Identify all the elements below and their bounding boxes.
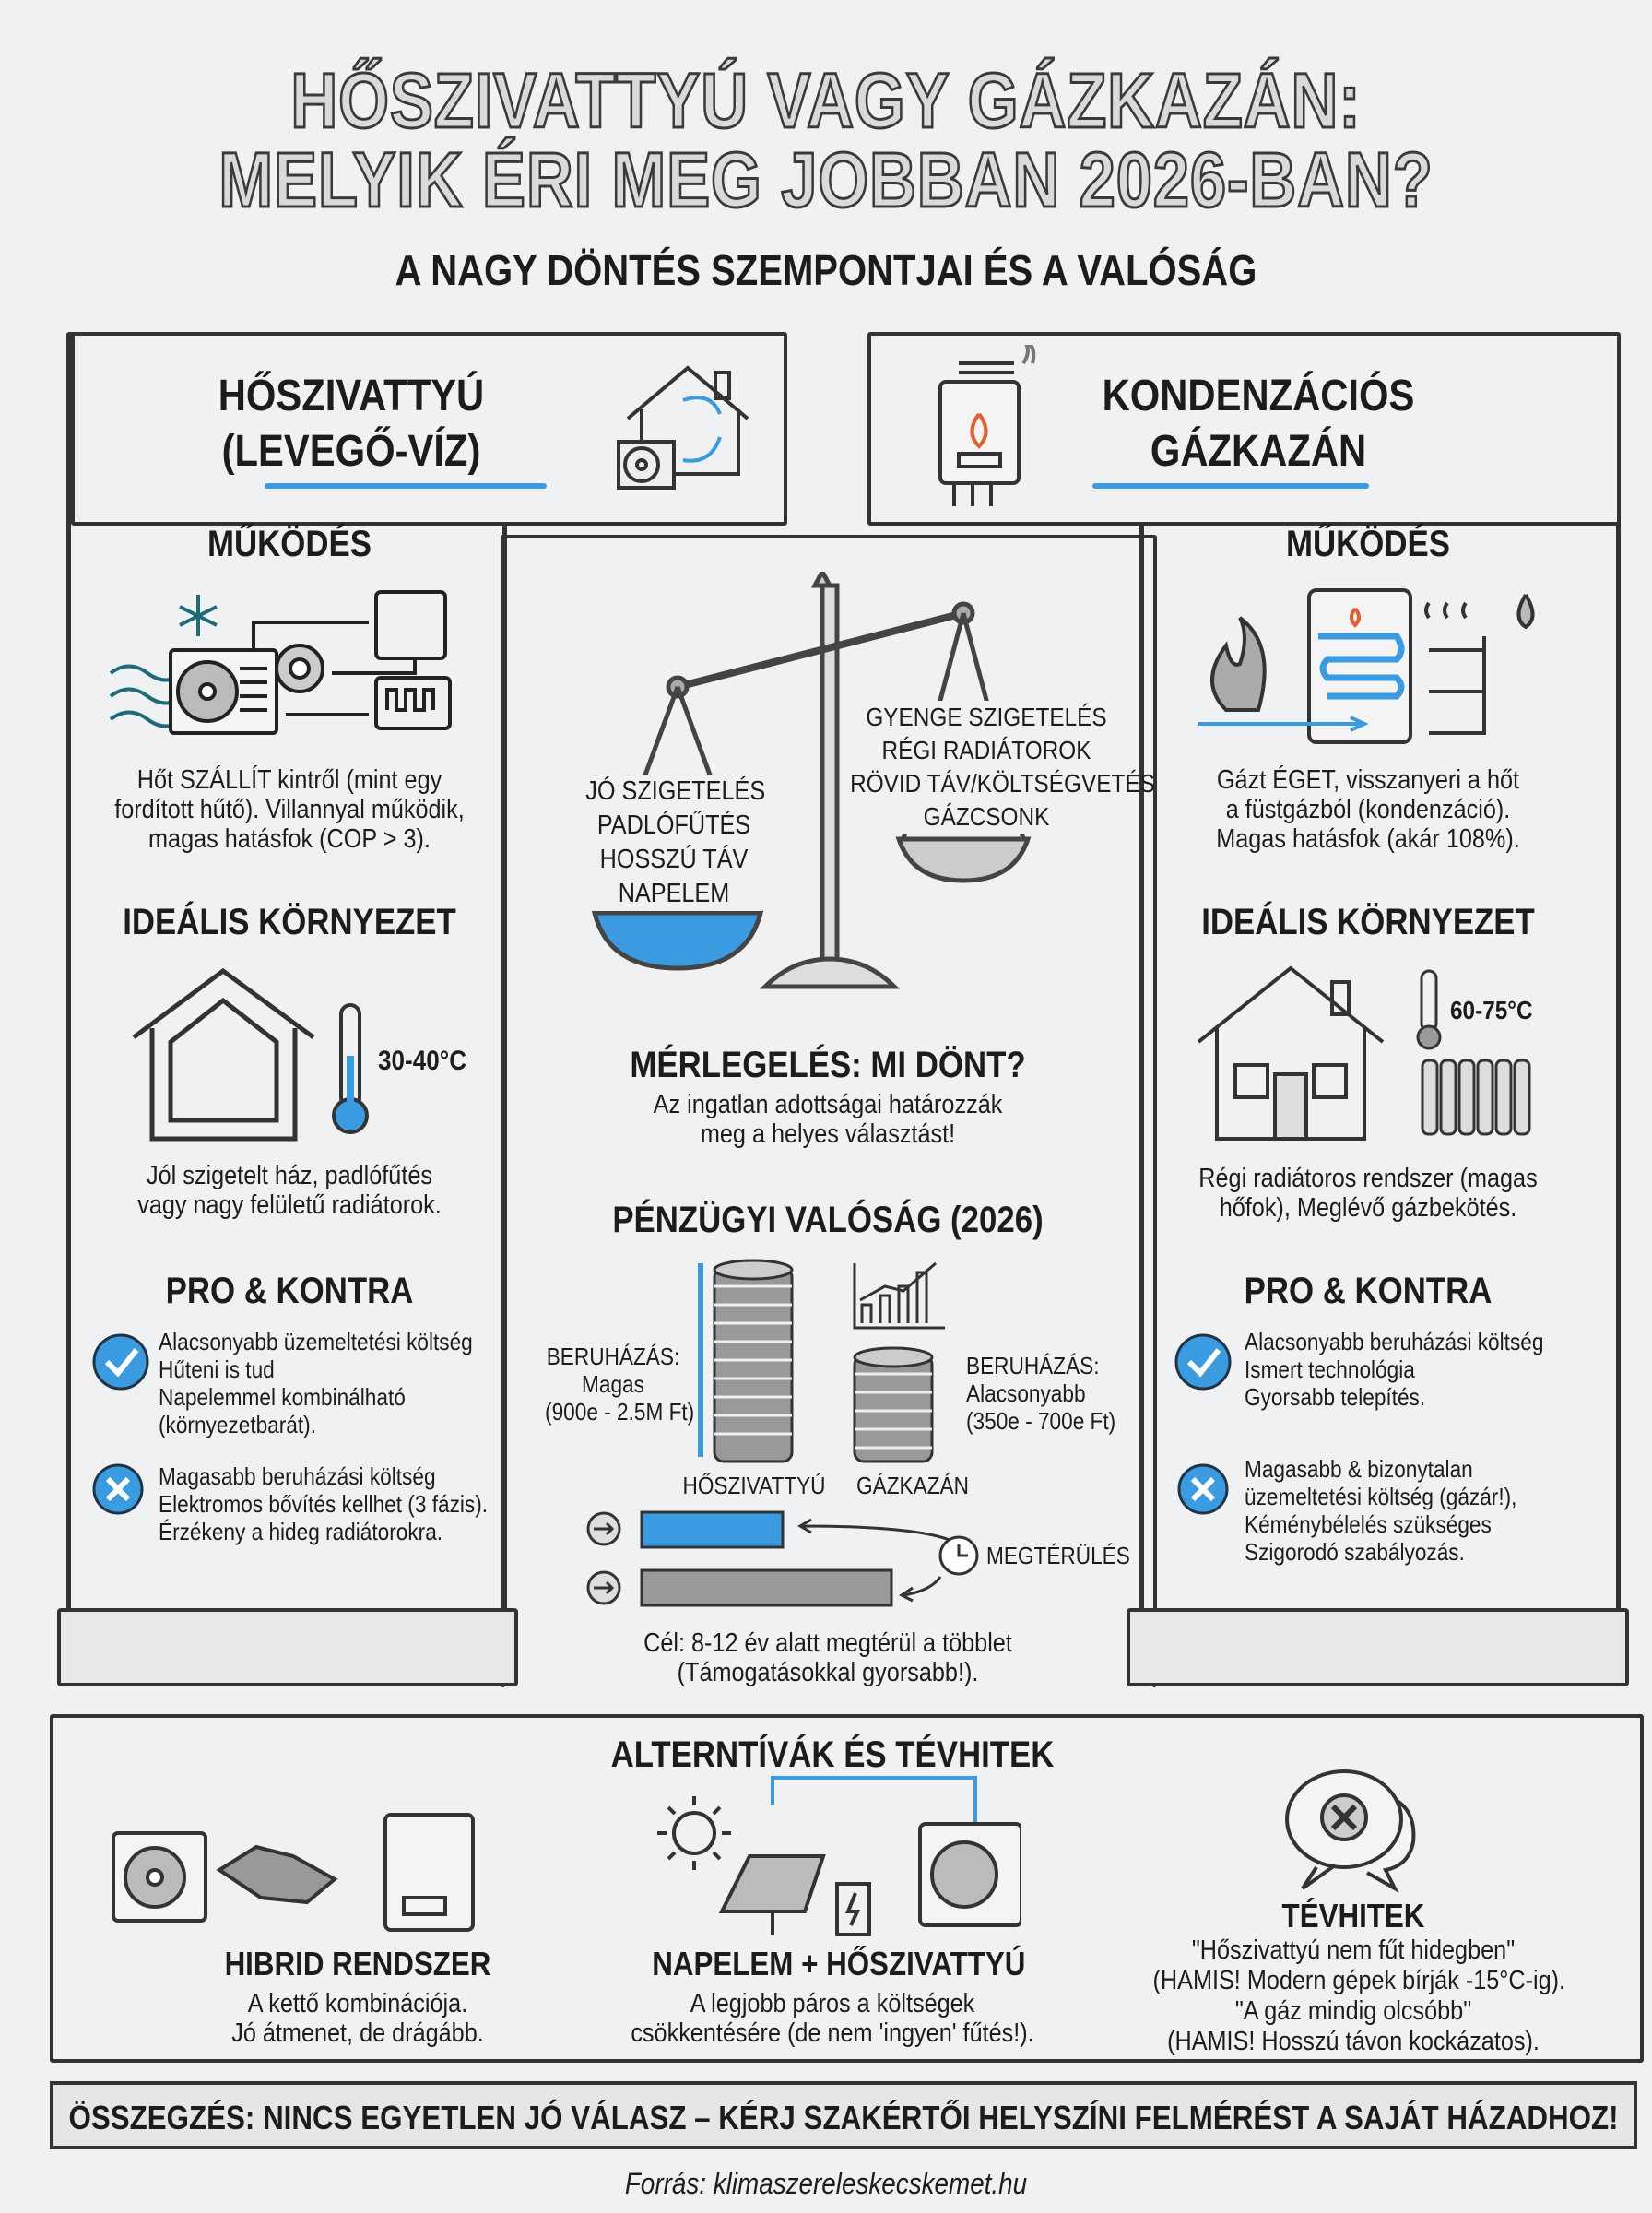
list: cons left [159, 1462, 488, 1545]
list: cons right: Magasabb & bizonytalan [1245, 1455, 1473, 1483]
panel: right header [867, 332, 1621, 526]
text: tévhitek: "Hőszivattyú nem fűt hidegben" [1192, 1935, 1515, 1965]
heading: mérlegelés: MÉRLEGELÉS: MI DÖNT? [630, 1045, 1026, 1085]
text: hibrid [231, 1989, 484, 2048]
list: pros right: Alacsonyabb beruházási költség [1245, 1328, 1543, 1355]
icon: thermometer 30-40 [332, 1003, 369, 1134]
label: gas investment: (350e - 700e Ft) [966, 1407, 1115, 1435]
list: pros left [159, 1328, 473, 1438]
heading: tévhitek: TÉVHITEK [1282, 1897, 1424, 1935]
text: mérlegelés [653, 1090, 1003, 1149]
text: tévhitek: "A gáz mindig olcsóbb" [1235, 1996, 1471, 2026]
text: boiler operation [1216, 765, 1520, 854]
text: napelem: csökkentésére (de nem 'ingyen' fűtés!). [631, 2018, 1034, 2048]
heading: condensing boiler: GÁZKAZÁN [1150, 427, 1366, 476]
list: cons right: Kéménybélelés szükséges [1245, 1510, 1492, 1538]
label: heat pump investment: BERUHÁZÁS: [547, 1343, 679, 1370]
list: cons left: Magasabb beruházási költség [159, 1462, 436, 1490]
heading: működés right: MŰKÖDÉS [1286, 524, 1450, 564]
list: cons right: Szigorodó szabályozás. [1245, 1538, 1465, 1566]
heading: pro & kontra right: PRO & KONTRA [1245, 1271, 1492, 1311]
text: boiler operation: Gázt ÉGET, visszanyeri a hőt [1217, 765, 1519, 795]
heading: condensing boiler: KONDENZÁCIÓS [1103, 372, 1414, 420]
label: 30-40°C: 30-40°C [378, 1046, 466, 1076]
label: heat pump investment: (900e - 2.5M Ft) [545, 1398, 694, 1426]
icon: check left [92, 1333, 149, 1391]
title [218, 57, 1434, 223]
text: ideal environment left: vagy nagy felületű radiátorok. [137, 1190, 442, 1220]
heading: pro & kontra left: PRO & KONTRA [166, 1271, 413, 1311]
text: ideal environment right: hőfok), Meglévő gázbekötés. [1220, 1193, 1516, 1223]
icon: old house [1197, 966, 1385, 1141]
list: pros left: (környezetbarát). [159, 1411, 316, 1438]
heading: heat pump: (LEVEGŐ-VÍZ) [222, 427, 480, 476]
label: heat pump investment: Magas [582, 1370, 644, 1398]
text: right pan: GÁZCSONK [924, 802, 1049, 831]
label: HŐSZIVATTYÚ: HŐSZIVATTYÚ [683, 1472, 825, 1499]
text: right pan [850, 701, 1123, 834]
panel: center [501, 535, 1157, 1687]
text: ideal environment left: Jól szigetelt ház, padlófűtés [147, 1161, 432, 1190]
panel: alternatives [50, 1714, 1644, 2063]
heading: ideális környezet left: IDEÁLIS KÖRNYEZET [123, 902, 456, 942]
list: pros left: Hűteni is tud [159, 1355, 275, 1383]
summary bar: ÖSSZEGZÉS: NINCS EGYETLEN JÓ VÁLASZ – KÉRJ SZAKÉRTŐI HELYSZÍNI FELMÉRÉST A SAJÁT HÁZADHOZ! [68, 2099, 1619, 2136]
icon: boiler heat exchanger [1198, 588, 1535, 744]
subtitle: A NAGY DÖNTÉS SZEMPONTJAI ÉS A VALÓSÁG [395, 246, 1257, 294]
text: heat pump operation: fordított hűtő). Villannyal működik, [114, 795, 465, 824]
icon: x left [92, 1464, 144, 1514]
text: tévhitek: (HAMIS! Modern gépek bírják -15°C-ig). [1152, 1966, 1565, 1995]
text: left pan: PADLÓFŰTÉS [597, 811, 750, 840]
title: MELYIK ÉRI MEG JOBBAN 2026-BAN? [218, 136, 1434, 223]
label: megtérülés: MEGTÉRÜLÉS [986, 1542, 1130, 1569]
icon: radiator [1422, 1059, 1530, 1136]
label: gas investment [966, 1352, 1115, 1435]
text: boiler operation: Magas hatásfok (akár 108%). [1216, 824, 1520, 854]
list: cons left: Elektromos bővítés kellhet (3 fázis). [159, 1490, 488, 1518]
label: GÁZKAZÁN: GÁZKAZÁN [856, 1472, 969, 1499]
text: right pan: RÖVID TÁV/KÖLTSÉGVETÉS [850, 769, 1155, 798]
text: goal: Cél: 8-12 év alatt megtérül a többlet [643, 1628, 1012, 1658]
text: ideal environment right [1198, 1164, 1538, 1223]
source: Forrás: klimaszereleskecskemet.hu [625, 2167, 1027, 2200]
heading: működés left: MŰKÖDÉS [207, 524, 372, 564]
heading: hibrid: HIBRID RENDSZER [225, 1945, 490, 1982]
panel: right column [1139, 516, 1621, 1614]
panel: left column [66, 332, 507, 1614]
text: right pan: RÉGI RADIÁTOROK [882, 736, 1091, 764]
text: left pan: JÓ SZIGETELÉS [585, 776, 765, 806]
icon: balance scale [592, 572, 1031, 988]
text: goal [643, 1628, 1012, 1687]
text: mérlegelés: Az ingatlan adottságai határozzák [654, 1090, 1002, 1119]
list: pros left: Napelemmel kombinálható [159, 1383, 406, 1411]
label: gas investment: BERUHÁZÁS: [966, 1352, 1100, 1379]
list: pros right: Ismert technológia [1245, 1355, 1415, 1383]
panel: left header [71, 332, 787, 526]
text: hibrid: A kettő kombinációja. [248, 1989, 467, 2018]
icon: insulated house [133, 968, 315, 1142]
pillar base left [57, 1608, 518, 1686]
underline [265, 483, 547, 489]
heading: condensing boiler [1103, 371, 1414, 476]
text: napelem: A legjobb páros a költségek [690, 1989, 974, 2018]
heading: heat pump: HŐSZIVATTYÚ [218, 372, 484, 420]
list: cons right [1245, 1455, 1516, 1566]
text: right pan: GYENGE SZIGETELÉS [866, 703, 1107, 731]
label: heat pump investment [545, 1343, 694, 1426]
label: gas investment: Alacsonyabb [966, 1379, 1086, 1407]
list: pros right [1245, 1328, 1543, 1411]
text: left pan: NAPELEM [619, 879, 729, 908]
text: mérlegelés: meg a helyes választást! [701, 1119, 955, 1149]
icon: x right [1178, 1464, 1228, 1514]
text: hibrid: Jó átmenet, de drágább. [231, 2018, 484, 2048]
chart: payback bars [586, 1510, 979, 1606]
text: goal: (Támogatásokkal gyorsabb!). [678, 1658, 978, 1687]
text: left pan [585, 775, 762, 911]
heading: ideális környezet right: IDEÁLIS KÖRNYEZET [1201, 902, 1535, 942]
icon: hybrid [112, 1813, 475, 1932]
chart: coin stacks [698, 1260, 945, 1462]
heading: alternatives: ALTERNTÍVÁK ÉS TÉVHITEK [611, 1734, 1054, 1775]
text: heat pump operation: Hőt SZÁLLÍT kintről (mint egy [137, 765, 442, 795]
text: boiler operation: a füstgázból (kondenzáció). [1226, 795, 1510, 824]
icon: heat pump diagram [109, 590, 452, 735]
list: pros left: Alacsonyabb üzemeltetési költség [159, 1328, 473, 1355]
heading: napelem: NAPELEM + HŐSZIVATTYÚ [652, 1945, 1025, 1982]
title: HŐSZIVATTYÚ VAGY GÁZKAZÁN: [290, 57, 1362, 144]
text: heat pump operation: magas hatásfok (COP > 3). [148, 824, 431, 854]
icon: gas boiler [938, 345, 1036, 506]
text: heat pump operation [114, 765, 465, 854]
text: tévhitek: (HAMIS! Hosszú távon kockázatos). [1167, 2027, 1540, 2056]
icon: check right [1174, 1333, 1232, 1391]
text: left pan: HOSSZÚ TÁV [600, 845, 748, 874]
icon: speech bubble [1285, 1769, 1416, 1893]
heading: pénzügyi: PÉNZÜGYI VALÓSÁG (2026) [612, 1200, 1044, 1240]
text: ideal environment right: Régi radiátoros rendszer (magas [1198, 1164, 1538, 1193]
underline [1092, 483, 1369, 489]
icon: thermometer 60-75 [1416, 970, 1442, 1049]
list: cons left: Érzékeny a hideg radiátorokra. [159, 1518, 442, 1545]
label: 60-75°C: 60-75°C [1450, 996, 1533, 1024]
icon: solar + heat pump [657, 1776, 1021, 1936]
heading: heat pump [218, 371, 484, 476]
text: ideal environment left [137, 1161, 442, 1220]
icon: house with heat pump [617, 365, 749, 490]
list: pros right: Gyorsabb telepítés. [1245, 1383, 1425, 1411]
pillar base right [1127, 1608, 1629, 1686]
text: tévhitek [1152, 1935, 1565, 2056]
list: cons right: üzemeltetési költség (gázár!), [1245, 1483, 1516, 1510]
summary bar [50, 2081, 1637, 2149]
text: napelem [631, 1989, 1034, 2048]
